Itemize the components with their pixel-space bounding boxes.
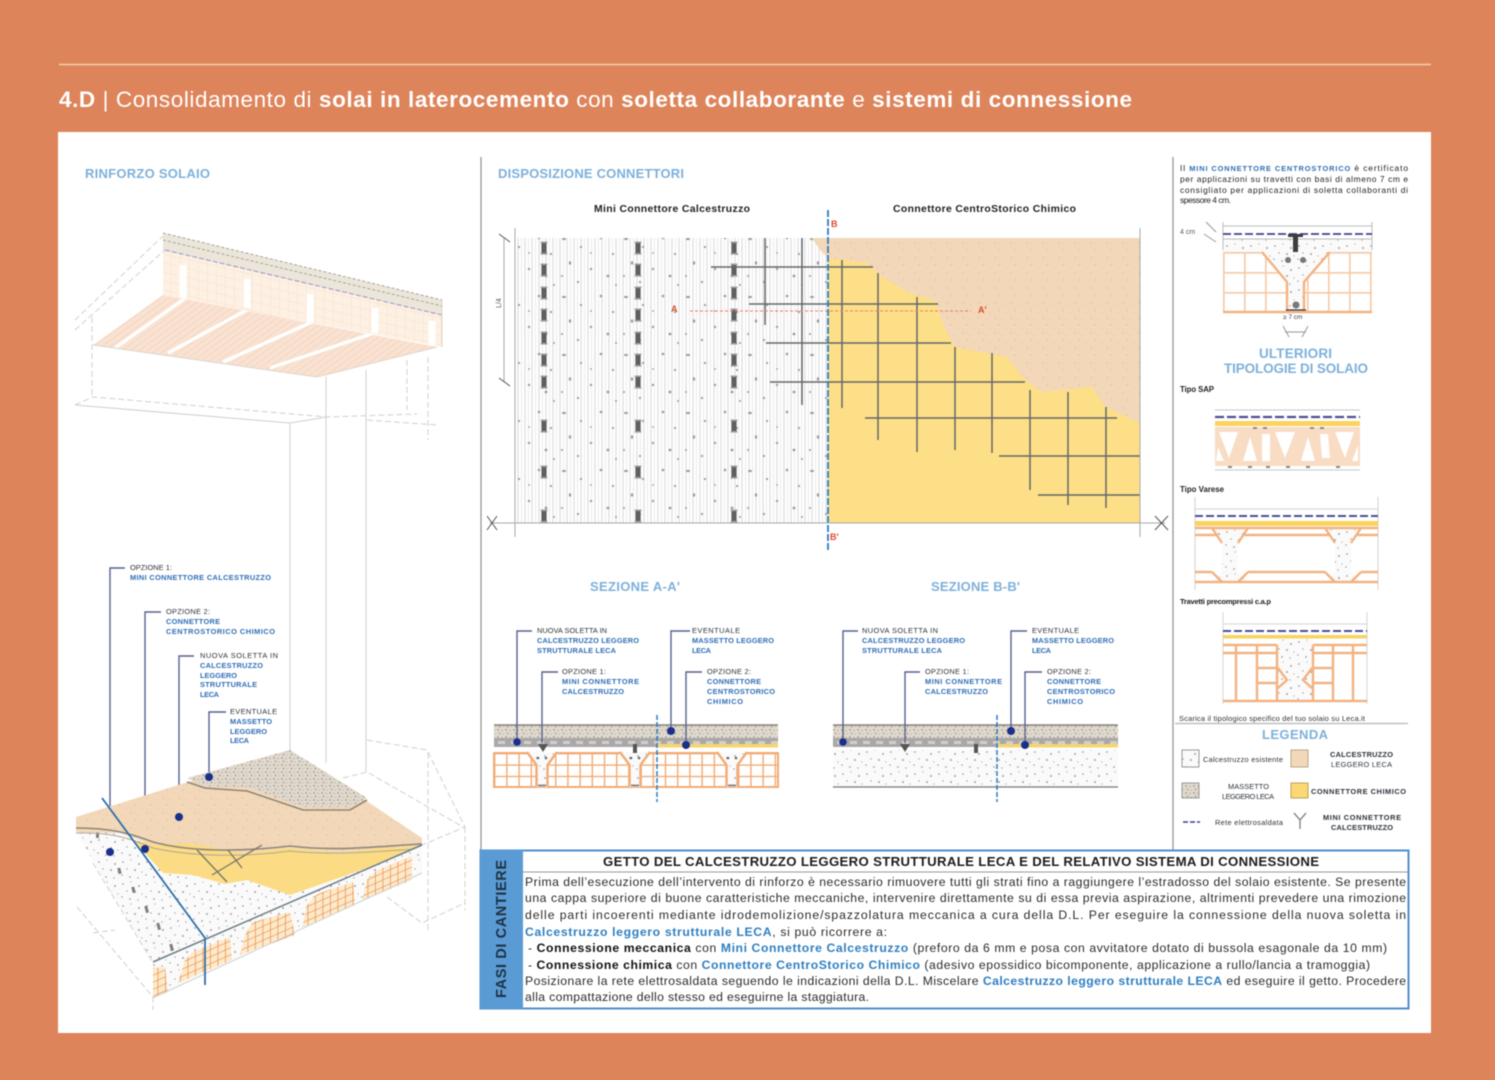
markers on the isometric xyxy=(106,773,213,856)
callouts for section B-B': MINI CONNETTORE xyxy=(925,677,1002,686)
detail section of joist: 4 cm xyxy=(1180,229,1195,236)
callouts for section B-B': CENTROSTORICO xyxy=(1047,687,1115,696)
section lines and dimensions xyxy=(690,310,971,312)
legend: rete elettrosaldata xyxy=(1183,818,1284,827)
note on mini connector: Il MINI CONNETTORE CENTROSTORICO è certificato xyxy=(1180,163,1408,173)
side tab: FASI DI CANTIERE xyxy=(494,860,510,998)
detail section of joist: ≥ 7 cm xyxy=(1283,314,1302,321)
legend: mini connettore: MINI CONNETTORE xyxy=(1323,813,1401,822)
callout: nuova soletta xyxy=(179,651,278,817)
callouts for section A-A': OPZIONE 1: xyxy=(562,667,606,676)
detail section of joist xyxy=(1180,222,1372,337)
download note: Scarica il tipologico specifico del tuo solaio su Leca.it xyxy=(1179,714,1366,723)
callouts for section B-B': CALCESTRUZZO xyxy=(925,687,988,696)
callout: nuova soletta: STRUTTURALE xyxy=(200,680,257,689)
label: mini connettore: Mini Connettore Calcestruzzo xyxy=(594,204,750,215)
side tab xyxy=(480,850,523,1009)
legend: rete elettrosaldata: Rete elettrosaldata xyxy=(1215,818,1284,827)
box body text: una cappa superiore di buone caratteristiche meccaniche, intervenire direttamente su di essa previa aspirazione, altrimenti prevedere una rimozione xyxy=(525,891,1406,905)
label: tipo SAP: Tipo SAP xyxy=(1180,385,1214,394)
callout: opzione 1: OPZIONE 1: xyxy=(130,563,172,572)
panel: sezione A-A' xyxy=(494,579,778,802)
floor type SAP xyxy=(1215,410,1360,470)
callout: eventuale massetto: MASSETTO xyxy=(230,717,272,726)
callout: opzione 2: CENTROSTORICO CHIMICO xyxy=(166,627,275,636)
plan view drawing: B' xyxy=(830,532,839,542)
legend: calcestruzzo esistente xyxy=(1182,750,1283,767)
callouts for section B-B': OPZIONE 1: xyxy=(925,667,969,676)
callouts for section A-A': STRUTTURALE LECA xyxy=(537,646,617,655)
legend: mini connettore: CALCESTRUZZO xyxy=(1331,823,1393,832)
legend: massetto: LEGGERO LECA xyxy=(1222,792,1274,801)
label: tipo Varese: Tipo Varese xyxy=(1180,485,1225,494)
callouts for section A-A': EVENTUALE xyxy=(692,626,740,635)
label: connettore chimico: Connettore CentroStorico Chimico xyxy=(893,204,1076,215)
panel: rinforzo solaio xyxy=(75,166,465,1010)
column dividers xyxy=(481,157,1173,850)
plan view drawing: A' xyxy=(978,305,987,315)
callouts for section B-B': CONNETTORE xyxy=(1047,677,1101,686)
note on mini connector xyxy=(1180,163,1408,205)
connector columns xyxy=(541,242,737,523)
callout: nuova soletta: CALCESTRUZZO xyxy=(200,661,263,670)
callouts for section A-A': MINI CONNETTORE xyxy=(562,677,639,686)
callout: opzione 1: MINI CONNETTORE CALCESTRUZZO xyxy=(130,573,271,582)
upper isometric ceiling view xyxy=(75,233,442,772)
panel: legenda xyxy=(1182,727,1406,832)
callouts for section B-B': MASSETTO LEGGERO xyxy=(1032,636,1114,645)
callout: eventuale massetto: EVENTUALE xyxy=(230,707,277,716)
callout: opzione 2: CONNETTORE xyxy=(166,617,220,626)
box body text: Posizionare la rete elettrosaldata seguendo le indicazioni della D.L. Miscelare Calcestruzzo leggero strutturale LECA ed eseguire il getto. Procedere xyxy=(525,974,1406,988)
callout: eventuale massetto: LECA xyxy=(230,736,250,745)
box body text: alla compattazione dello stesso ed eseguirne la staggiatura. xyxy=(525,990,869,1004)
panel: disposizione connettori xyxy=(487,166,1168,552)
heading: rinforzo solaio: RINFORZO SOLAIO xyxy=(85,166,210,181)
callouts for section A-A': MASSETTO LEGGERO xyxy=(692,636,774,645)
callout: opzione 2 xyxy=(145,607,275,849)
legend: massetto: MASSETTO xyxy=(1228,782,1269,791)
legend: connettore chimico: CONNETTORE CHIMICO xyxy=(1311,787,1406,796)
lower isometric floor build-up xyxy=(76,740,465,1010)
panel: fasi di cantiere xyxy=(480,850,1408,1009)
heading: ulteriori tipologie: TIPOLOGIE DI SOLAIO xyxy=(1224,361,1368,376)
legend: calcestruzzo leggero: LEGGERO LECA xyxy=(1331,760,1392,769)
legend: connettore chimico xyxy=(1291,783,1406,798)
box body text: Prima dell’esecuzione dell’intervento di rinforzo è necessario rimuovere tutti gli strati fino a raggiungere l’estradosso del solaio esistente. Se presente xyxy=(525,875,1406,889)
legend: calcestruzzo leggero: CALCESTRUZZO xyxy=(1330,750,1393,759)
plan view drawing: A xyxy=(671,304,678,314)
panel: right column notes and floor types xyxy=(1175,163,1408,724)
callouts for section A-A': CHIMICO xyxy=(707,697,743,706)
note on mini connector: consigliato per applicazioni di soletta collaboranti di xyxy=(1180,185,1408,195)
plan view drawing xyxy=(487,210,1168,552)
callouts for section B-B': NUOVA SOLETTA IN xyxy=(862,626,938,635)
legend: calcestruzzo esistente: Calcestruzzo esistente xyxy=(1203,755,1283,764)
heading: legenda: LEGENDA xyxy=(1262,727,1329,742)
callouts for section A-A': CONNETTORE xyxy=(707,677,761,686)
label: travetti precompressi: Travetti precompressi c.a.p xyxy=(1180,597,1271,606)
title: 4.D | Consolidamento di solai in laterocemento con soletta collaborante e sistemi di connessione xyxy=(59,87,1132,112)
callout: opzione 2: OPZIONE 2: xyxy=(166,607,210,616)
plan view drawing: L/4 xyxy=(496,298,503,308)
legend: calcestruzzo leggero xyxy=(1291,750,1393,769)
callout: nuova soletta: LEGGERO xyxy=(200,671,237,680)
callouts for section A-A': NUOVA SOLETTA IN xyxy=(537,626,607,635)
box body text: delle parti incoerenti mediante idrodemolizione/spazzolatura meccanica a cura della D.L. Per eseguire la connessione della nuova soletta in xyxy=(525,908,1406,922)
reinforcing mesh xyxy=(711,238,1140,508)
floor type Varese xyxy=(1195,497,1378,590)
callouts for section B-B': LECA xyxy=(1032,646,1052,655)
section drawing A-A' xyxy=(494,715,778,802)
note on mini connector: spessore 4 cm. xyxy=(1180,195,1231,205)
callouts for section B-B': STRUTTURALE LECA xyxy=(862,646,943,655)
heading: sezione A-A': SEZIONE A-A' xyxy=(590,579,680,594)
heading: disposizione connettori: DISPOSIZIONE CONNETTORI xyxy=(498,166,684,181)
box body text: - Connessione chimica con Connettore CentroStorico Chimico (adesivo epossidico bicomponente, applicazione a rullo/lancia a tramoggia) xyxy=(528,958,1370,972)
heading: ulteriori tipologie: ULTERIORI xyxy=(1259,346,1332,361)
callout: nuova soletta: NUOVA SOLETTA IN xyxy=(200,651,278,660)
callouts for section B-B': CHIMICO xyxy=(1047,697,1083,706)
callouts for section A-A': CALCESTRUZZO LEGGERO xyxy=(537,636,639,645)
box title: GETTO DEL CALCESTRUZZO LEGGERO STRUTTURALE LECA E DEL RELATIVO SISTEMA DI CONNESSIONE xyxy=(603,854,1319,869)
callouts for section A-A' xyxy=(513,626,775,749)
legend: massetto xyxy=(1182,782,1274,801)
callouts for section B-B': OPZIONE 2: xyxy=(1047,667,1091,676)
callouts for section B-B': EVENTUALE xyxy=(1032,626,1079,635)
plan view drawing: B xyxy=(831,219,838,229)
heading: ulteriori tipologie xyxy=(1224,346,1368,376)
callouts for section B-B': CALCESTRUZZO LEGGERO xyxy=(862,636,965,645)
callouts for section A-A': CENTROSTORICO xyxy=(707,687,775,696)
callout: nuova soletta: LECA xyxy=(200,690,220,699)
heading: sezione B-B': SEZIONE B-B' xyxy=(931,579,1020,594)
white content panel xyxy=(58,132,1431,1033)
floor type travetti xyxy=(1223,612,1367,704)
callouts for section B-B' xyxy=(839,626,1115,749)
callout: opzione 1 xyxy=(110,563,271,852)
panel: sezione B-B' xyxy=(833,579,1118,802)
box body text: - Connessione meccanica con Mini Connettore Calcestruzzo (preforo da 6 mm e posa con avvitatore dotato di bussola esagonale da 10 mm) xyxy=(528,941,1387,955)
callout: eventuale massetto xyxy=(209,707,277,777)
note on mini connector: per applicazioni su travetti con basi di almeno 7 cm e xyxy=(1180,174,1408,184)
callouts for section A-A': LECA xyxy=(692,646,712,655)
box body text xyxy=(525,875,1406,1004)
callouts for section A-A': CALCESTRUZZO xyxy=(562,687,624,696)
section drawing B-B' xyxy=(833,715,1118,802)
callouts for section A-A': OPZIONE 2: xyxy=(707,667,751,676)
callout: eventuale massetto: LEGGERO xyxy=(230,727,267,736)
box body text: Calcestruzzo leggero strutturale LECA, si può ricorrere a: xyxy=(525,925,887,939)
legend: mini connettore xyxy=(1294,813,1401,832)
